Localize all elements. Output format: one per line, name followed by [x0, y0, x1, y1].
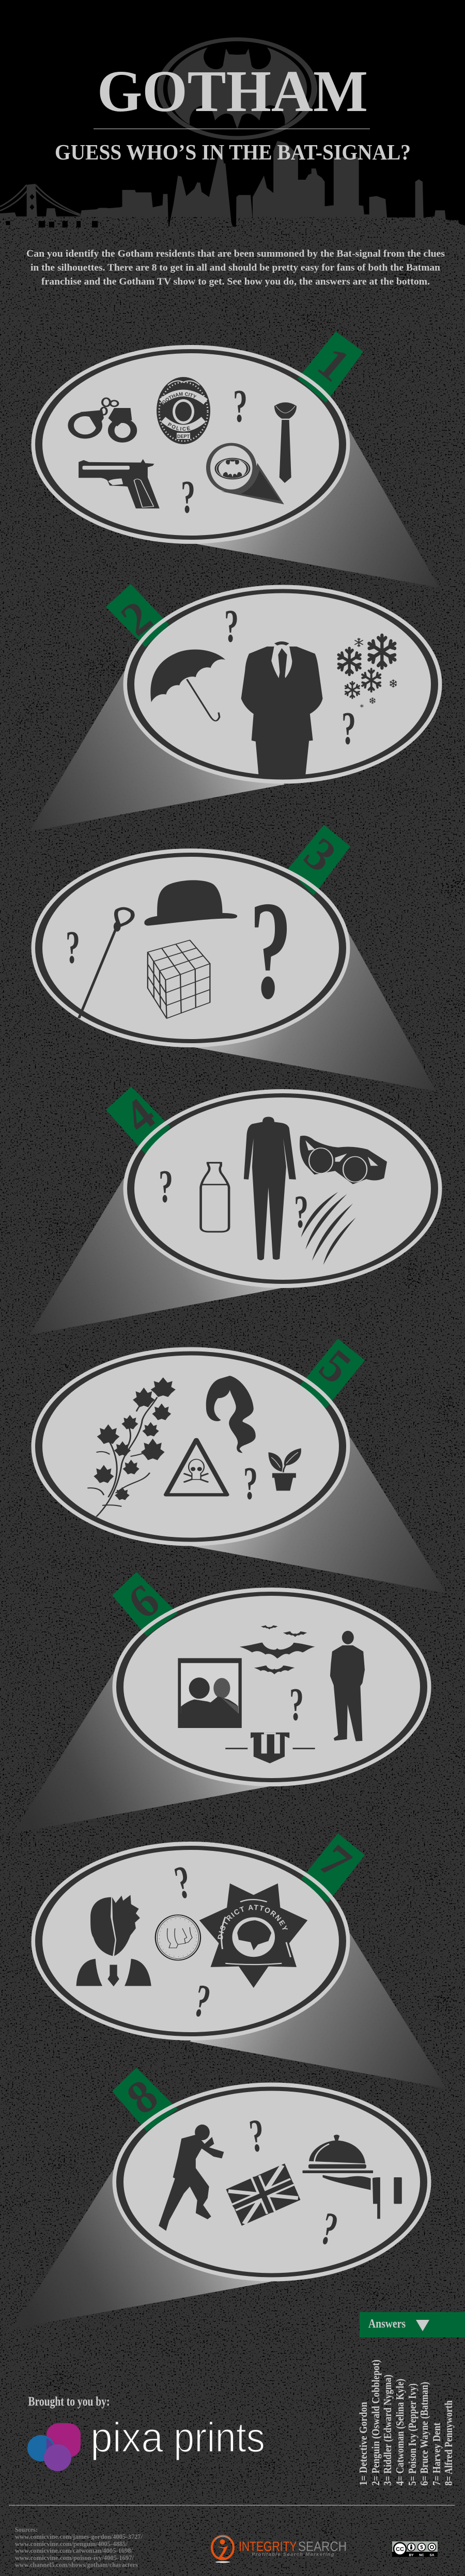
- licence: creative commons badge: [392, 2541, 438, 2557]
- logo: Integrity Search: SEARCH: [298, 2538, 347, 2554]
- spotlight beam 3: [194, 932, 436, 1091]
- number badge 6: [112, 1572, 178, 1636]
- licence: creative commons badge: BY: [409, 2553, 414, 2557]
- question mark: ?: [243, 1458, 258, 1509]
- number badge 7: [301, 1833, 365, 1903]
- icon: bowler hat: [144, 880, 237, 925]
- question mark: ?: [66, 922, 80, 973]
- number badge 1: 1: [308, 337, 359, 391]
- subtitle: GUESS WHO’S IN THE BAT-SIGNAL?: [55, 141, 411, 165]
- answers list: 1= Detective Gordon: [357, 2402, 369, 2486]
- panel: silhouette 7: [31, 1833, 445, 2088]
- spotlight beam 7: [190, 1930, 446, 2088]
- number badge 2: 2: [112, 591, 162, 646]
- icon: police badge: DEPT: [177, 434, 190, 439]
- number badge 3: [288, 825, 350, 896]
- answers list: 3= Riddler (Edward Nygma): [381, 2375, 394, 2486]
- icon: headless suit: [241, 641, 323, 776]
- icon: toxic warning triangle: [166, 1440, 227, 1495]
- intro text: Can you identify the Gotham residents that are been summoned by the Bat-signal from the clues: [26, 248, 445, 259]
- spotlight beam 5: [190, 1434, 446, 1593]
- icon: necktie and collar: [274, 402, 297, 483]
- panel: silhouette 6: [13, 1572, 431, 1833]
- icon: goggles: [300, 1136, 387, 1184]
- icon: pistol: [79, 459, 160, 509]
- icon: framed family photo: [178, 1658, 242, 1728]
- icon: district attorney badge: DISTRICT ATTORNEY: [218, 1905, 288, 1940]
- icon: catsuit: [244, 1117, 296, 1260]
- icon: bat-signal logo behind title: [157, 37, 317, 140]
- number badge 2: [106, 584, 169, 647]
- panel: silhouette 1: [31, 332, 438, 587]
- answers list: 7= Harvey Dent: [430, 2423, 443, 2486]
- intro text: in the silhouettes. There are 8 to get in all and should be pretty easy for fans of both the Batman: [30, 262, 440, 273]
- large question mark: ?: [250, 872, 292, 1028]
- icon: bat-signal: [208, 444, 284, 505]
- logo: pixa prints: prints: [174, 2414, 265, 2461]
- icon: question-mark cane: [79, 908, 133, 1018]
- question mark: ?: [171, 1856, 195, 1909]
- icon: ivy vine: [87, 1377, 176, 1517]
- number badge 8: 8: [117, 2070, 167, 2124]
- licence: creative commons badge: CC: [396, 2546, 404, 2552]
- icon: snowflakes: [338, 635, 396, 708]
- sources: [15, 2526, 143, 2569]
- logo: Integrity Search: INTEGRITY: [239, 2538, 297, 2554]
- icon: handcuffs: [71, 398, 134, 440]
- icon: umbrella: [150, 650, 225, 721]
- licence: creative commons badge: SA: [429, 2553, 435, 2557]
- number badge 3: 3: [295, 828, 346, 882]
- sources: Sources:: [15, 2526, 38, 2534]
- icon: milk bottle: [201, 1163, 229, 1232]
- answers tab: Answers: [368, 2317, 406, 2331]
- number badge 4: [106, 1087, 171, 1154]
- number badge 4: 4: [115, 1089, 165, 1143]
- icon: police badge: POLICE: [167, 422, 190, 431]
- icon: two-headed coin: [156, 1915, 200, 1960]
- intro text: [26, 248, 445, 287]
- panel: silhouette 2: [29, 584, 442, 831]
- answers tab: [360, 2312, 465, 2337]
- icon: police badge: GOTHAM CITY: [162, 392, 196, 404]
- logo: Integrity Search: Profitable Search Marketing: [252, 2552, 334, 2557]
- skyline silhouette: [0, 141, 465, 320]
- question mark: ?: [247, 2110, 267, 2162]
- icon: boxer: [159, 2125, 224, 2231]
- icon: police badge: [157, 377, 210, 444]
- question mark: ?: [294, 1186, 308, 1237]
- sources: www.comicvine.com/poison-ivy/4005-1697/: [15, 2554, 134, 2562]
- question mark: ?: [233, 381, 247, 432]
- icon: two-faced man: [76, 1895, 151, 1986]
- logo: pixa prints: [27, 2414, 265, 2471]
- intro text: franchise and the Gotham TV show to get. See how you do, the answers are at the bottom.: [41, 276, 430, 287]
- icon: Wayne W emblem: [225, 1733, 315, 1763]
- sources: www.comicvine.com/james-gordon/4005-3727/: [15, 2533, 143, 2540]
- logo: Integrity Search: [212, 2536, 347, 2563]
- spotlight beam 6: [13, 1672, 270, 1833]
- number badge 5: 5: [310, 1340, 361, 1394]
- answers list: 2= Penguin (Oswald Cobblepot): [369, 2360, 382, 2486]
- number badge 7: 7: [310, 1835, 361, 1889]
- icon: rubik's cube: [148, 940, 210, 1018]
- panel: silhouette 8: [13, 2068, 431, 2329]
- logo: pixa prints: pixa: [90, 2414, 163, 2461]
- panel: silhouette 4: [29, 1087, 442, 1335]
- sources: www.comicvine.com/catwoman/4005-1698/: [15, 2547, 133, 2554]
- question mark: ?: [316, 2203, 343, 2256]
- number badge 5: [300, 1339, 365, 1408]
- number badge 6: 6: [119, 1575, 169, 1629]
- spotlight beam 4: [29, 1177, 282, 1335]
- icon: union jack flag: [226, 2163, 300, 2226]
- icon: claw marks: [301, 1192, 356, 1265]
- icon: man silhouette: [330, 1631, 365, 1741]
- question mark: ?: [190, 1975, 214, 2028]
- spotlight beam 2: [29, 671, 285, 831]
- number badge 1: [298, 332, 363, 403]
- answers list: [357, 2360, 455, 2486]
- spotlight beam 8: [13, 2168, 271, 2329]
- title: GOTHAM: [97, 58, 368, 124]
- answers list: 4= Catwoman (Selina Kyle): [394, 2379, 406, 2486]
- question mark: ?: [289, 1679, 304, 1730]
- answers list: 5= Poison Ivy (Pepper Ivy): [406, 2383, 419, 2486]
- question mark: ?: [224, 601, 239, 652]
- number badge 8: [112, 2068, 178, 2131]
- answers list: 6= Bruce Wayne (Batman): [418, 2382, 430, 2486]
- brought to you by heading: Brought to you by:: [28, 2395, 110, 2409]
- icon: potted plant: [268, 1448, 301, 1490]
- question mark: ?: [181, 472, 195, 523]
- sources: www.comicvine.com/penguin/4005-4885/: [15, 2540, 128, 2548]
- question mark: ?: [159, 1161, 173, 1212]
- icon: butler with cloche: [302, 2134, 402, 2219]
- icon: long wavy hair: [206, 1376, 256, 1453]
- icon: district attorney badge: [199, 1883, 308, 1988]
- licence: creative commons badge: $: [420, 2545, 423, 2550]
- sources: www.channel5.com/shows/gotham/characters: [15, 2561, 138, 2569]
- licence: creative commons badge: NC: [419, 2553, 424, 2557]
- panel: silhouette 3: [31, 825, 436, 1091]
- answers list: 8= Alfred Pennyworth: [442, 2400, 455, 2486]
- question mark: ?: [342, 703, 356, 754]
- panel: silhouette 5: [31, 1339, 446, 1593]
- spotlight beam 1: [196, 427, 439, 588]
- icon: flock of bats: [240, 1625, 315, 1674]
